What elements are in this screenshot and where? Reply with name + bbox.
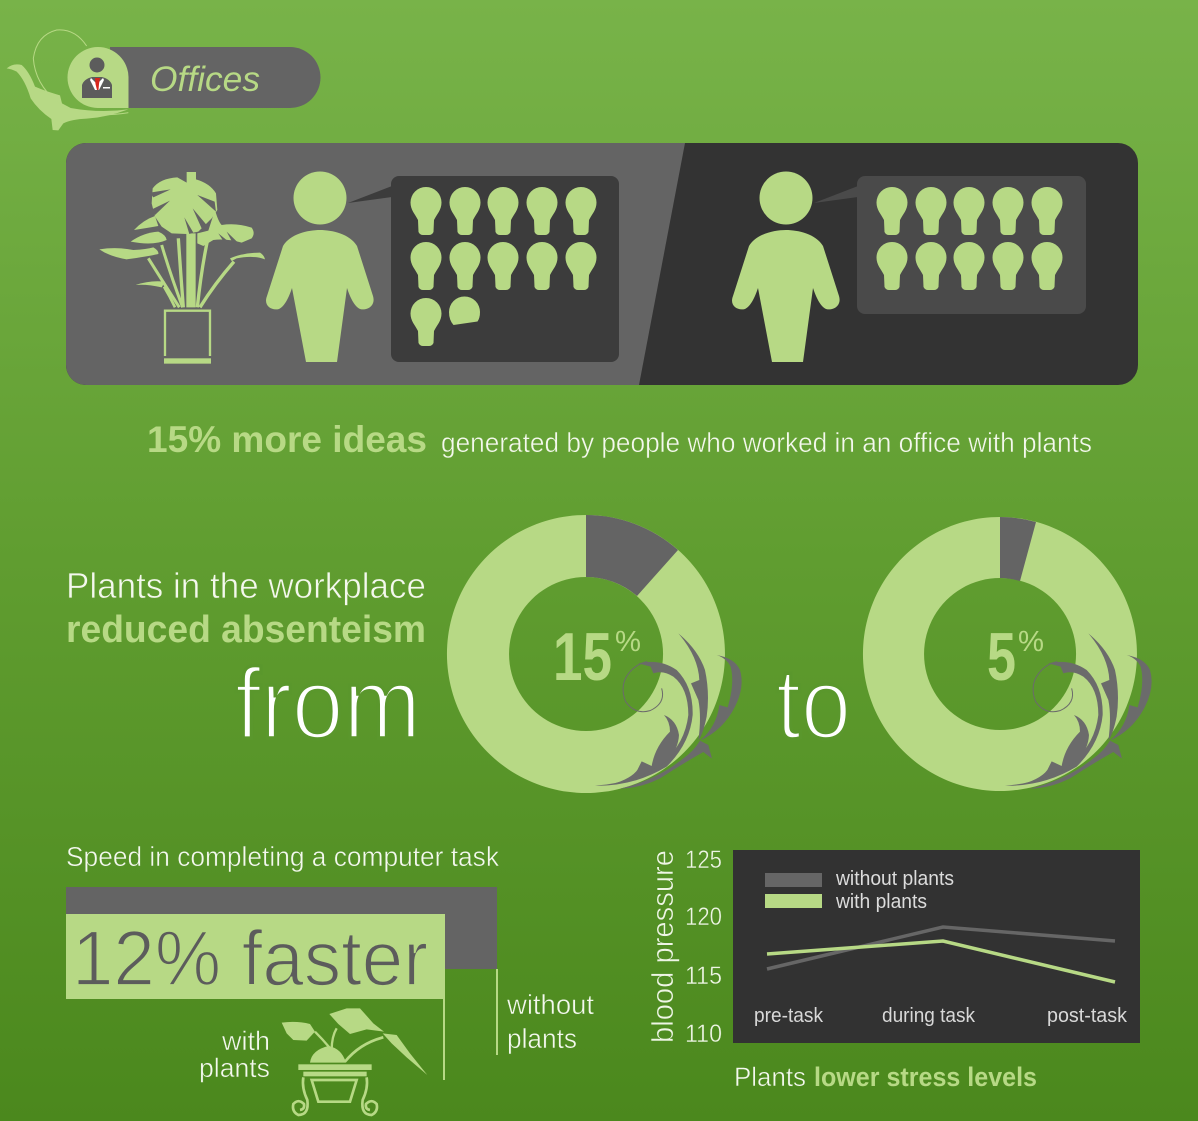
y axis values: 115 — [685, 962, 722, 990]
label: with plants: with — [221, 1026, 270, 1056]
caption: plants lower stress levels: lower stress levels — [814, 1062, 1037, 1092]
line chart: blood pressure — [645, 846, 1140, 1048]
donut chart: 5%: 5 — [987, 619, 1016, 695]
x axis labels: pre-task — [754, 1005, 824, 1027]
caption: plants lower stress levels — [734, 1062, 1037, 1092]
legend: with plants — [835, 891, 927, 913]
x axis labels: post-task — [1047, 1005, 1128, 1027]
pill background — [110, 47, 320, 108]
x axis labels: during task — [882, 1005, 976, 1027]
icon: person with plants — [266, 172, 374, 362]
heading: Offices: Offices — [150, 60, 260, 99]
plot area — [733, 850, 1140, 1043]
legend: without plants — [835, 868, 954, 890]
bar chart: speed in completing a task — [66, 841, 594, 1115]
donut chart: 15%: 15 — [553, 619, 612, 695]
bar: with plants — [66, 914, 445, 999]
icon: person without plants — [732, 172, 840, 362]
label: without plants: plants — [507, 1023, 577, 1054]
donut chart: 15%: % — [615, 626, 641, 658]
text: to: to — [776, 648, 851, 760]
label: with plants — [199, 1026, 270, 1083]
line: with plants — [767, 941, 1115, 982]
statement: 15% more ideas: 15% more ideas — [147, 419, 427, 460]
panel: ideas comparison — [66, 143, 1138, 385]
y axis values: 125 — [685, 846, 722, 874]
text: from: from — [235, 648, 421, 760]
panel background dark — [66, 143, 1138, 385]
icon: plant on stand — [282, 1008, 427, 1115]
label: 12% faster: 12% faster — [72, 914, 428, 1002]
panel background gray, with plants side — [66, 143, 685, 385]
text: plants reduced absenteeism: Plants in the workplace — [66, 565, 426, 606]
statement: 15% more ideas: generated by people who worked in an office with plants — [441, 427, 1092, 458]
legend — [765, 868, 954, 913]
label: without plants: without — [506, 989, 594, 1020]
label: with plants: plants — [199, 1053, 270, 1083]
text: plants reduced absenteeism: reduced absenteism — [66, 609, 426, 651]
icon: potted monstera — [99, 172, 265, 364]
header: Offices — [7, 30, 320, 130]
y axis values: 120 — [685, 903, 722, 931]
ornament: leaf swirl — [7, 30, 128, 130]
speech bubble with 11.5 bulbs — [348, 176, 619, 362]
y axis title: blood pressure — [645, 850, 680, 1043]
donut chart: 5%: % — [1018, 626, 1044, 658]
chart title: Speed in completing a computer task — [66, 841, 500, 872]
donut chart: 5% — [863, 517, 1152, 791]
y axis values — [685, 846, 722, 1048]
bar: without plants — [66, 887, 497, 969]
flourish — [1005, 633, 1152, 789]
text: plants reduced absenteeism — [66, 565, 426, 651]
y axis values: 110 — [685, 1020, 722, 1048]
line: without plants — [767, 927, 1115, 969]
caption: plants lower stress levels: Plants — [734, 1062, 806, 1092]
statement: 15% more ideas — [147, 419, 1092, 460]
donut chart: 15% — [447, 515, 742, 793]
x axis labels — [754, 1005, 1128, 1027]
flourish — [595, 633, 742, 789]
speech bubble with 10 bulbs — [814, 176, 1086, 314]
icon: teardrop badge with businessman — [68, 47, 128, 108]
label: without plants — [506, 989, 594, 1054]
